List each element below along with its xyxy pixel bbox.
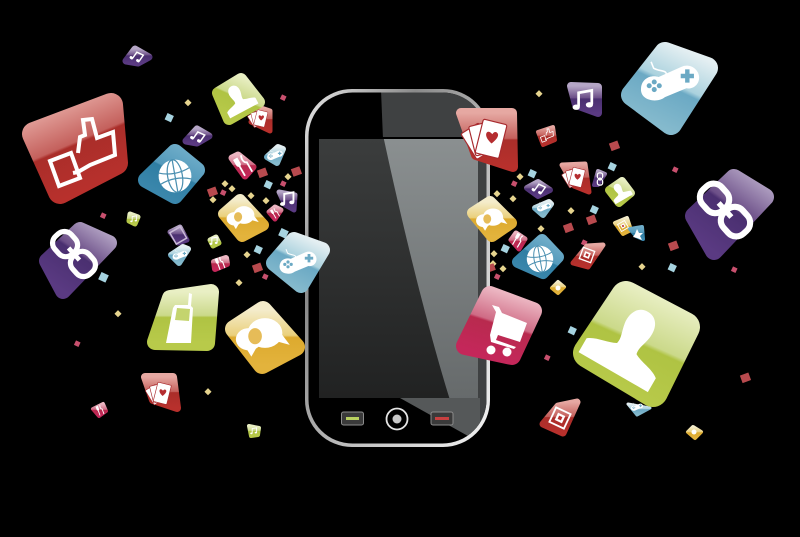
icon: teal gamepad tile — [171, 247, 188, 263]
icon: green person large — [579, 292, 685, 392]
icon: crimson cutlery bottom left — [93, 404, 106, 416]
phone screen — [319, 135, 490, 400]
icon: yellow tile — [552, 282, 564, 293]
icon: red cards bottom left — [145, 377, 177, 408]
icon: purple music right — [571, 86, 598, 113]
icon: yellow chat large — [234, 310, 296, 365]
button: green call — [342, 412, 364, 425]
icon: small crimson cutlery — [269, 207, 281, 219]
icon: yellow frame tile — [615, 218, 631, 234]
icon: teal gamepad over phone — [274, 240, 322, 285]
small confetti tiles — [74, 90, 751, 395]
icon: purple music right of chat — [279, 192, 295, 210]
icon: red cards mid right — [561, 164, 589, 192]
icon: yellow tile bottom right — [688, 427, 701, 438]
icon: blue globe left — [146, 152, 197, 196]
icon: small gamepad under person — [628, 403, 650, 415]
icon: teal tile right — [535, 202, 551, 215]
phone frame — [305, 89, 490, 447]
icon: purple film tile — [170, 227, 187, 244]
icon: purple chain link left — [47, 228, 109, 291]
icon: red thumbs up — [34, 105, 116, 192]
icon: red frame — [573, 245, 603, 267]
phone — [305, 89, 490, 447]
button: red end — [431, 412, 453, 425]
icon: red cards over phone — [461, 113, 513, 167]
icon: blue star tile — [630, 227, 643, 240]
phone body — [308, 92, 486, 444]
icon: small purple music — [186, 129, 209, 145]
icon: small teal gamepad — [267, 147, 283, 163]
icon: red cutlery — [232, 155, 253, 177]
icon: purple tile right — [527, 181, 550, 196]
icon: red thumbs tile — [538, 127, 555, 145]
icon: crimson shopping cart — [465, 295, 533, 356]
icon: purple chain link right — [694, 178, 765, 251]
icon: blue globe right — [518, 240, 558, 274]
icon: small purple music top left — [126, 49, 149, 64]
icon: small red cards behind person — [247, 108, 270, 131]
icon: green tile bottom — [249, 426, 259, 436]
icon: yellow chat medium — [224, 200, 263, 236]
icon: red frame bottom — [543, 402, 577, 433]
icon: crimson cutlery tile — [214, 257, 227, 270]
icon: green person small — [217, 79, 259, 119]
button: home — [386, 408, 408, 430]
icon: yellow chat right — [473, 202, 511, 236]
icon: crimson cutlery right — [511, 233, 525, 249]
icon: green person right small — [607, 179, 633, 204]
icon: purple tile behind cards — [594, 171, 605, 185]
icon: green tile left — [129, 214, 138, 224]
icon: green phone — [155, 292, 211, 343]
icon: teal gamepad large — [632, 53, 707, 124]
icon: green music tile — [209, 237, 219, 246]
